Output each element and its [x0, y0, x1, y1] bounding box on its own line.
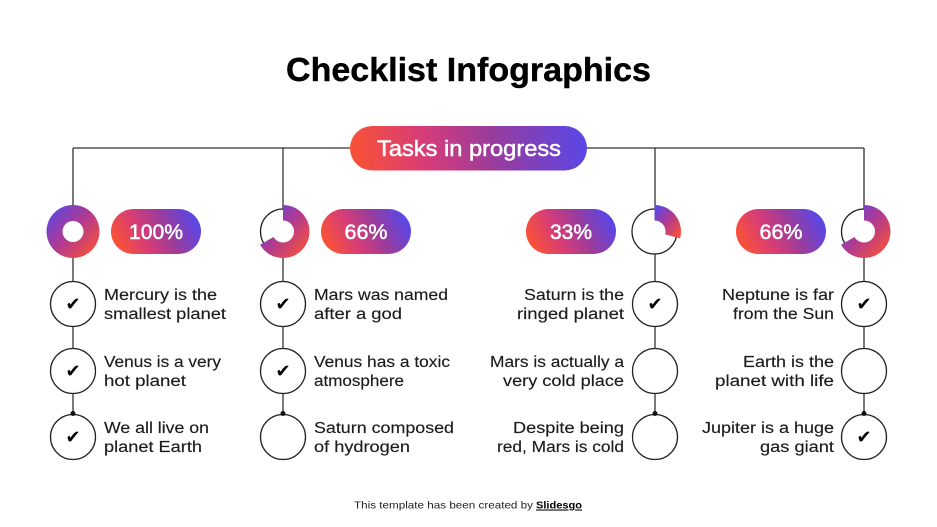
task: Jupiter: ✔	[856, 427, 872, 448]
percent pill 66% right: 66%	[760, 221, 802, 244]
heading pill: tasks in progress	[350, 126, 587, 170]
task: Earth: We all live on	[104, 420, 209, 437]
task: Jupiter: gas giant	[760, 439, 835, 456]
task: Saturn hydrogen: Saturn composed	[314, 420, 454, 437]
percent pill 66%	[321, 209, 411, 254]
task: Earth: planet Earth	[104, 439, 202, 456]
task: Despite red: Despite being	[513, 420, 624, 437]
column 2	[260, 205, 454, 460]
task: Earth life: planet with life	[715, 373, 834, 390]
task: Neptune: ✔	[856, 294, 872, 315]
task: Earth life	[715, 348, 886, 394]
task: Venus	[50, 348, 221, 394]
task: Mercury: Mercury is the	[104, 287, 217, 304]
task: Venus: Venus is a very	[104, 354, 221, 371]
percent pill 66% right	[736, 209, 826, 254]
column 1	[46, 205, 227, 460]
task: Saturn ringed: Saturn is the	[524, 287, 624, 304]
task: Mars cold	[490, 348, 678, 394]
connector lines	[73, 148, 864, 414]
task: Saturn hydrogen	[260, 411, 454, 460]
task: Venus: ✔	[65, 361, 81, 382]
task: Jupiter	[702, 411, 886, 460]
task: Mercury	[50, 282, 227, 326]
footer credit: Slidesgo	[536, 500, 582, 512]
task: Jupiter: Jupiter is a huge	[702, 420, 834, 437]
task: Neptune	[722, 282, 886, 326]
title: Checklist Infographics	[286, 51, 651, 88]
task: Mars cold: Mars is actually a	[490, 354, 624, 371]
task: Venus toxic: ✔	[275, 361, 291, 382]
heading pill: tasks in progress: Tasks in progress	[377, 136, 561, 161]
task: Venus toxic: Venus has a toxic	[314, 354, 450, 371]
task: Saturn ringed	[517, 282, 678, 326]
column 4	[702, 205, 890, 460]
task: Venus: hot planet	[104, 373, 187, 390]
task: Despite red	[497, 411, 678, 460]
column 3	[490, 205, 681, 460]
task: Venus toxic: atmosphere	[314, 373, 404, 390]
footer credit: This template has been created by	[354, 500, 534, 512]
task: Mars named: after a god	[314, 306, 402, 323]
task: Saturn ringed: ✔	[647, 294, 663, 315]
percent pill 33%	[526, 209, 616, 254]
progress ring 33%	[632, 205, 681, 254]
percent pill 33%: 33%	[550, 221, 592, 244]
task: Mars named: Mars was named	[314, 287, 448, 304]
percent pill 100%	[111, 209, 201, 254]
task: Venus toxic	[260, 348, 450, 394]
percent pill 100%: 100%	[129, 221, 183, 244]
task: Mars named	[260, 282, 448, 326]
task: Saturn hydrogen: of hydrogen	[314, 439, 410, 456]
task: Earth life: Earth is the	[743, 354, 834, 371]
progress ring 66%	[260, 205, 309, 258]
task: Earth	[50, 411, 209, 460]
task: Mars cold: very cold place	[503, 373, 624, 390]
task: Saturn ringed: ringed planet	[517, 306, 625, 323]
progress ring 100%	[46, 205, 100, 258]
task: Despite red: red, Mars is cold	[497, 439, 624, 456]
task: Mercury: smallest planet	[104, 306, 227, 323]
task: Mars named: ✔	[275, 294, 291, 315]
task: Neptune: Neptune is far	[722, 287, 834, 304]
task: Mercury: ✔	[65, 294, 81, 315]
task: Earth: ✔	[65, 427, 81, 448]
progress ring 66% right	[841, 205, 890, 258]
percent pill 66%: 66%	[344, 221, 388, 244]
task: Neptune: from the Sun	[733, 306, 834, 323]
